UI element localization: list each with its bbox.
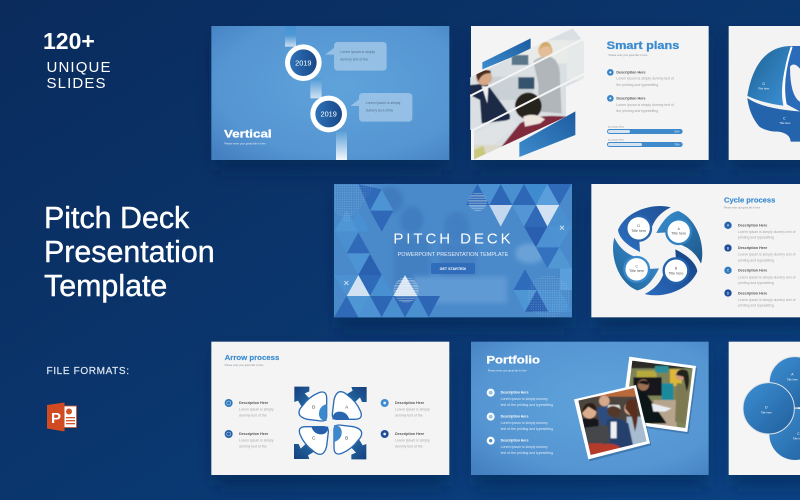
item B xyxy=(724,244,796,262)
slide: cycle crop top right xyxy=(729,26,800,160)
arrow diagram: C xyxy=(312,436,316,441)
item right 1: Description Here xyxy=(395,401,424,405)
item D: Lorem Ipsum is simply dummy text of xyxy=(738,298,796,302)
cycle diagram: B xyxy=(675,266,678,270)
cycle diagram: D xyxy=(637,224,640,228)
icon: PowerPoint: P xyxy=(51,410,61,427)
team photo xyxy=(470,27,585,160)
slide: Arrow process xyxy=(211,342,449,475)
description item 1 xyxy=(607,69,674,87)
heading: 120+ unique slides xyxy=(43,28,110,92)
description item 2: Description Here xyxy=(616,97,646,101)
item right 1: Lorem Ipsum is simply xyxy=(395,407,430,411)
description item 2 xyxy=(607,95,674,113)
arrow diagram: B xyxy=(345,435,348,440)
progress bar 2: 70% xyxy=(674,143,680,147)
callout top: Lorem Ipsum is simply xyxy=(340,50,375,54)
callout bottom: Lorem Ipsum is simply xyxy=(366,101,401,105)
description item 1: Lorem Ipsum is simply dummy text of xyxy=(616,77,674,81)
callout bottom xyxy=(350,93,412,122)
slide shadows xyxy=(215,36,800,486)
cycle diagram: Title here xyxy=(631,229,646,233)
item C xyxy=(724,267,796,285)
cycle diagram: Title here xyxy=(668,272,684,276)
heading Cycle process xyxy=(724,196,775,210)
progress bar 1: 50% xyxy=(674,130,680,134)
item B: Description Here xyxy=(738,246,767,250)
circle A: A xyxy=(791,373,794,377)
slide: Smart plans xyxy=(470,26,709,160)
description item 1: the printing and typesetting xyxy=(616,83,658,87)
heading Cycle process: Cycle process xyxy=(724,196,775,205)
item left 1: Lorem Ipsum is simply xyxy=(239,407,274,411)
timeline node 2019 bottom xyxy=(310,96,347,132)
cover subtitle: POWERPOINT PRESENTATION TEMPLATE xyxy=(398,252,509,258)
button: get started xyxy=(431,263,475,274)
progress bar 2 xyxy=(607,138,683,147)
item D: printing and typesetting xyxy=(738,304,774,308)
progress bar 1 xyxy=(607,126,683,134)
description item 1: Description Here xyxy=(616,71,646,75)
button: get started: GET STARTED! xyxy=(440,267,466,271)
item 2: Lorem Ipsum is simply dummy xyxy=(501,421,548,425)
heading Smart plans xyxy=(607,40,679,57)
cycle diagram: Title here xyxy=(629,269,644,273)
item D: Description Here xyxy=(738,291,767,295)
heading Smart plans: Please enter your great title in here xyxy=(609,54,648,57)
item left 2: Description Here xyxy=(239,432,268,436)
title: Pitch Deck Presentation Template xyxy=(44,201,215,303)
triangles pattern xyxy=(334,184,572,317)
heading Portfolio: Please enter your great title in here xyxy=(488,370,527,373)
item right 1 xyxy=(381,399,430,417)
item B: printing and typesetting xyxy=(738,258,774,262)
circle D xyxy=(743,383,794,434)
callout top xyxy=(325,42,387,71)
icon: PowerPoint xyxy=(47,402,76,432)
segment D xyxy=(747,46,800,113)
photo frame back xyxy=(621,357,697,434)
description item 2: the printing and typesetting xyxy=(616,109,658,113)
title: Pitch Deck Presentation Template: Presentation xyxy=(44,235,215,269)
item right 2: Lorem Ipsum is simply xyxy=(395,438,430,442)
item right 1: dummy text of the xyxy=(395,413,423,417)
item left 1 xyxy=(225,399,274,417)
heading Arrow process xyxy=(225,353,279,367)
item left 2: dummy text of the xyxy=(239,444,267,448)
cycle diagram: A xyxy=(677,227,680,231)
heading Arrow process: Arrow process xyxy=(225,353,279,362)
slide: Portfolio xyxy=(471,342,709,475)
item C: C xyxy=(727,269,730,273)
heading Cycle process: Please enter your great title in here xyxy=(724,207,761,210)
cycle diagram xyxy=(613,206,702,295)
slide: Pitch Deck cover xyxy=(334,184,572,318)
item 1: text of the printing and typesetting xyxy=(501,403,553,407)
circle D: D xyxy=(765,406,768,410)
item left 1: dummy text of the xyxy=(239,413,267,417)
item C: Lorem Ipsum is simply dummy text of xyxy=(738,275,796,279)
heading: 120+ unique slides: SLIDES xyxy=(46,75,106,92)
item 1: Description Here xyxy=(501,391,529,395)
background photo tint xyxy=(377,187,545,303)
segment C: Title here xyxy=(780,121,791,125)
segment C xyxy=(747,98,800,142)
item 2: text of the printing and typesetting xyxy=(501,427,553,431)
slide: Cycle process xyxy=(591,184,800,317)
timeline node 2019 bottom: 2019 xyxy=(321,110,337,119)
arrow diagram: A xyxy=(345,405,349,410)
segment D: D xyxy=(762,82,765,86)
item D: D xyxy=(727,291,730,295)
cycle diagram: Title here xyxy=(671,232,686,236)
item A: Lorem Ipsum is simply dummy text of xyxy=(738,230,796,234)
item 3 xyxy=(487,437,553,455)
blue parallelogram top xyxy=(482,38,531,69)
item B: B xyxy=(727,246,730,250)
item left 2: Lorem Ipsum is simply xyxy=(239,438,274,442)
timeline node 2019 top xyxy=(285,44,322,81)
cycle diagram: C xyxy=(635,264,638,268)
item right 2 xyxy=(381,430,430,448)
item 2: Description Here xyxy=(501,415,529,419)
title: Pitch Deck Presentation Template: Template xyxy=(44,269,167,303)
heading Arrow process: Please enter your great title in here xyxy=(225,364,264,367)
item 1: Lorem Ipsum is simply dummy xyxy=(501,397,548,401)
heading Portfolio: Portfolio xyxy=(486,355,540,367)
label: file formats: FILE FORMATS: xyxy=(46,366,129,377)
callout top: dummy text of the xyxy=(340,57,368,61)
item 3: Lorem Ipsum is simply dummy xyxy=(501,445,548,449)
slide title Vertical: Vertical xyxy=(224,128,272,140)
item A: Description Here xyxy=(738,224,767,228)
segment C: C xyxy=(783,116,786,120)
slide title Vertical: Please enter your great title in here xyxy=(224,142,266,146)
circle A: Title here xyxy=(787,377,798,381)
circle D: Title here xyxy=(761,410,772,414)
progress bar 1: Description Here xyxy=(608,126,625,129)
timeline node 2019 top: 2019 xyxy=(295,58,311,67)
item right 2: dummy text of the xyxy=(395,444,423,448)
photo frame front xyxy=(574,385,651,461)
item A: printing and typesetting xyxy=(738,236,774,240)
item 3: text of the printing and typesetting xyxy=(501,451,553,455)
item left 1: Description Here xyxy=(239,401,268,405)
cover title: PITCH DECK xyxy=(393,230,511,247)
slide: Vertical timeline xyxy=(211,26,449,160)
timeline bars xyxy=(285,26,347,160)
description item 2: Lorem Ipsum is simply dummy text of xyxy=(616,103,674,107)
callout bottom: dummy text of the xyxy=(366,109,393,113)
item B: Lorem Ipsum is simply dummy text of xyxy=(738,253,796,257)
progress bar 2: Description Here xyxy=(608,138,625,141)
item left 2 xyxy=(225,430,274,448)
heading: 120+ unique slides: 120+ xyxy=(43,28,95,54)
item right 2: Description Here xyxy=(395,432,424,436)
item C: printing and typesetting xyxy=(738,281,774,285)
item D xyxy=(724,289,796,308)
slide title Vertical xyxy=(224,128,272,146)
title: Pitch Deck Presentation Template: Pitch Deck xyxy=(44,201,190,235)
item 3: Description Here xyxy=(501,439,529,443)
blue parallelogram bottom xyxy=(519,111,575,157)
item A: A xyxy=(727,224,730,228)
circle A xyxy=(769,357,800,408)
arrow diagram xyxy=(294,387,367,459)
arrow diagram: D xyxy=(312,404,316,409)
heading Portfolio xyxy=(486,355,540,373)
item C: Description Here xyxy=(738,269,767,273)
item 1 xyxy=(487,389,553,407)
segment D: Title here xyxy=(758,86,770,90)
item 2 xyxy=(487,413,553,431)
circle C: C xyxy=(797,432,800,436)
heading: 120+ unique slides: UNIQUE xyxy=(46,59,110,76)
slide: Venn crop bottom right xyxy=(729,342,800,475)
heading Smart plans: Smart plans xyxy=(607,40,679,52)
circle C xyxy=(769,409,800,460)
dotted texture accents xyxy=(334,184,570,318)
item A xyxy=(724,222,796,240)
